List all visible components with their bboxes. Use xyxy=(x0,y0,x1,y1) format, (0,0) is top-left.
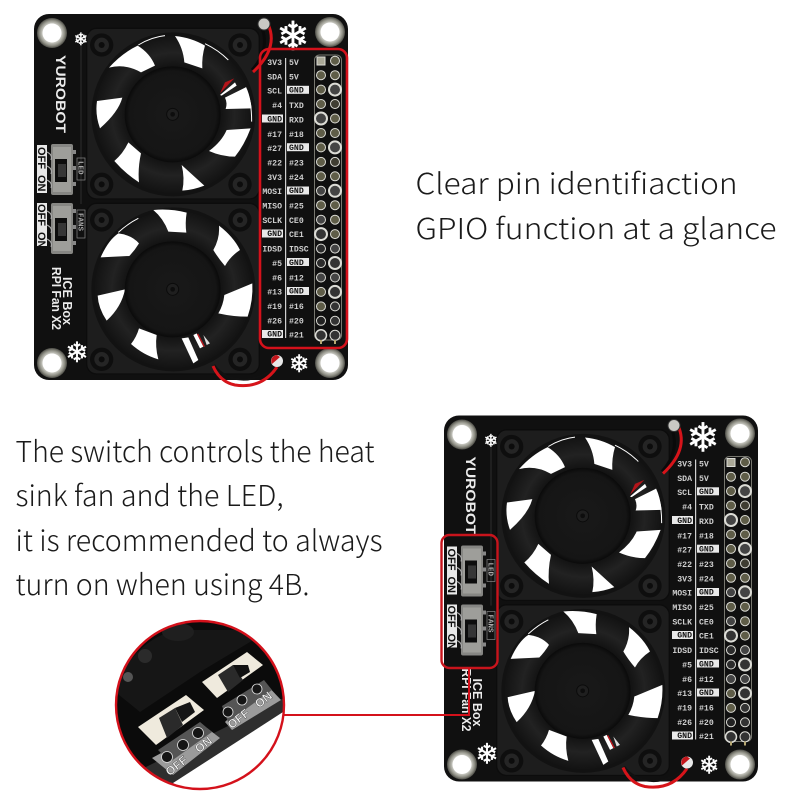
left pin labels: #27 xyxy=(267,145,282,154)
left pin labels: GND xyxy=(677,632,692,641)
left pin labels: SCL xyxy=(267,88,282,97)
caption: switch usage xyxy=(16,429,382,604)
product name: RPI Fan X2 xyxy=(49,267,64,330)
circular close-up of switches xyxy=(114,620,286,790)
product name: RPI Fan X2 xyxy=(459,668,474,732)
left pin labels: 3V3 xyxy=(677,460,692,470)
switch labels xyxy=(445,548,494,650)
right pin labels: CE0 xyxy=(699,618,714,627)
right pin labels: #18 xyxy=(699,532,714,541)
left pin labels: MISO xyxy=(262,202,282,212)
snowflake icons: ❄ xyxy=(65,336,89,369)
board photo: pin identification xyxy=(34,14,348,386)
left pin labels: SDA xyxy=(677,475,692,484)
left pin labels: #17 xyxy=(677,532,692,541)
switch labels: ON xyxy=(445,634,457,650)
left pin labels: #19 xyxy=(267,303,282,312)
left pin labels: #22 xyxy=(267,160,282,168)
close-up labels: OFF xyxy=(163,753,190,779)
close-up labels: OFF xyxy=(225,706,252,732)
left pin labels: #17 xyxy=(267,131,282,140)
product name xyxy=(459,668,485,732)
left pin labels: IDSD xyxy=(262,246,282,255)
left pin labels: GND xyxy=(267,115,282,124)
right pin labels: #21 xyxy=(289,332,304,341)
product name xyxy=(49,267,75,330)
left pin labels: #22 xyxy=(677,561,692,570)
caption: switch usage: sink fan and the LED, xyxy=(16,473,284,515)
right pin labels: RXD xyxy=(289,116,304,125)
switch labels: OFF xyxy=(35,204,47,226)
switch labels: OFF xyxy=(445,606,457,628)
right pin labels: GND xyxy=(289,187,304,196)
right pin labels: #23 xyxy=(289,160,304,168)
snowflake icons xyxy=(65,14,310,378)
brand logo: YUROBOT xyxy=(463,456,479,535)
left pin labels: MOSI xyxy=(262,188,282,197)
right pin labels: 5V xyxy=(699,460,709,470)
snowflake icons: ❄ xyxy=(699,752,719,780)
left pin labels: #13 xyxy=(267,289,282,298)
snowflake icons: ❄ xyxy=(686,416,720,462)
snowflake icons: ❄ xyxy=(484,432,498,452)
left pin labels: SCLK xyxy=(262,217,282,226)
left pin labels: 3V3 xyxy=(267,59,282,68)
right pin labels: #23 xyxy=(699,561,714,570)
left pin labels: #4 xyxy=(682,504,692,512)
right pin labels: #16 xyxy=(289,303,304,312)
right pin labels: CE0 xyxy=(289,217,304,226)
left pin labels: GND xyxy=(677,517,692,526)
left pin labels: 3V3 xyxy=(267,174,282,183)
right pin labels: #20 xyxy=(289,317,304,326)
snowflake icons: ❄ xyxy=(289,350,309,378)
right pin labels: IDSC xyxy=(289,246,309,255)
close-up labels xyxy=(166,692,273,775)
right pin labels: #20 xyxy=(699,719,714,728)
left pin labels: #26 xyxy=(677,719,692,728)
left pin labels: IDSD xyxy=(672,647,692,656)
caption: switch usage: The switch controls the heat xyxy=(16,429,374,471)
right pin labels: 5V xyxy=(289,59,299,68)
caption: pin identification: GPIO function at a glance xyxy=(416,206,776,248)
right pin labels: #24 xyxy=(289,174,304,183)
switch labels: LED xyxy=(486,562,494,577)
snowflake icons: ❄ xyxy=(74,30,88,50)
brand logo: YUROBOT xyxy=(53,55,69,133)
switch labels: OFF xyxy=(35,147,47,169)
right pin labels: RXD xyxy=(699,518,714,527)
left pin labels: MISO xyxy=(672,604,692,613)
right pin labels: GND xyxy=(699,689,714,698)
left pin labels: #5 xyxy=(272,260,282,269)
right pin labels: GND xyxy=(289,259,304,268)
left pin labels: #13 xyxy=(677,690,692,699)
switch labels: FANS xyxy=(486,614,494,633)
right pin labels: #25 xyxy=(289,202,304,212)
right pin labels: #16 xyxy=(699,704,714,714)
caption: pin identification: Clear pin identifiaction xyxy=(416,161,738,203)
switch labels: ON xyxy=(445,576,457,593)
right pin labels: GND xyxy=(289,87,304,96)
snowflake icons: ❄ xyxy=(475,738,499,770)
caption: switch usage: it is recommended to always xyxy=(16,518,382,560)
right pin labels: CE1 xyxy=(289,231,304,240)
left pin labels: #27 xyxy=(677,547,692,556)
close-up labels: ON xyxy=(192,734,215,756)
right pin labels: GND xyxy=(699,589,714,598)
red highlight: switches xyxy=(442,535,498,668)
left pin labels: 3V3 xyxy=(677,575,692,584)
right pin labels: #12 xyxy=(699,676,714,685)
arrow: connector line xyxy=(283,668,469,715)
left pin labels: #19 xyxy=(677,704,692,714)
close-up labels: ON xyxy=(252,689,275,711)
right pin labels: #21 xyxy=(699,733,714,742)
left pin labels: SCLK xyxy=(672,618,692,627)
left pin labels: SCL xyxy=(677,489,692,498)
switch labels: OFF xyxy=(445,548,457,571)
caption: pin identification xyxy=(416,161,776,248)
right pin labels: #12 xyxy=(289,274,304,283)
right pin labels: TXD xyxy=(289,102,304,111)
right pin labels: #24 xyxy=(699,575,714,584)
switch labels xyxy=(35,147,84,249)
right pin labels: GND xyxy=(699,660,714,669)
left pin labels: #26 xyxy=(267,317,282,326)
snowflake icons: ❄ xyxy=(276,14,310,60)
snowflake icons xyxy=(475,416,720,780)
right pin labels: #18 xyxy=(289,131,304,140)
left pin labels: #6 xyxy=(272,274,282,283)
switch labels: LED xyxy=(76,161,84,175)
switch labels: ON xyxy=(35,175,47,192)
right pin labels: TXD xyxy=(699,504,714,512)
right pin labels: GND xyxy=(699,488,714,497)
right pin labels: 5V xyxy=(699,475,709,484)
left pin labels: GND xyxy=(677,732,692,741)
product name: ICE Box xyxy=(470,678,485,727)
right pin labels: 5V xyxy=(289,73,299,82)
left pin labels: GND xyxy=(267,331,282,340)
left pin labels: MOSI xyxy=(672,590,692,599)
left pin labels: #6 xyxy=(682,676,692,685)
board photo: switches xyxy=(444,416,758,787)
left pin labels: #5 xyxy=(682,661,692,670)
right pin labels: GND xyxy=(289,144,304,153)
left pin labels: GND xyxy=(267,230,282,239)
red highlight: pin header xyxy=(260,49,347,348)
right pin labels: #25 xyxy=(699,604,714,613)
caption: switch usage: turn on when using 4B. xyxy=(16,562,310,604)
right pin labels: IDSC xyxy=(699,647,719,656)
right pin labels: CE1 xyxy=(699,633,714,642)
left pin labels: SDA xyxy=(267,73,282,82)
switch labels: FANS xyxy=(76,213,84,232)
switch labels: ON xyxy=(35,232,47,249)
right pin labels: GND xyxy=(699,546,714,555)
left pin labels: #4 xyxy=(272,102,282,111)
product name: ICE Box xyxy=(60,277,75,326)
right pin labels: GND xyxy=(289,288,304,297)
